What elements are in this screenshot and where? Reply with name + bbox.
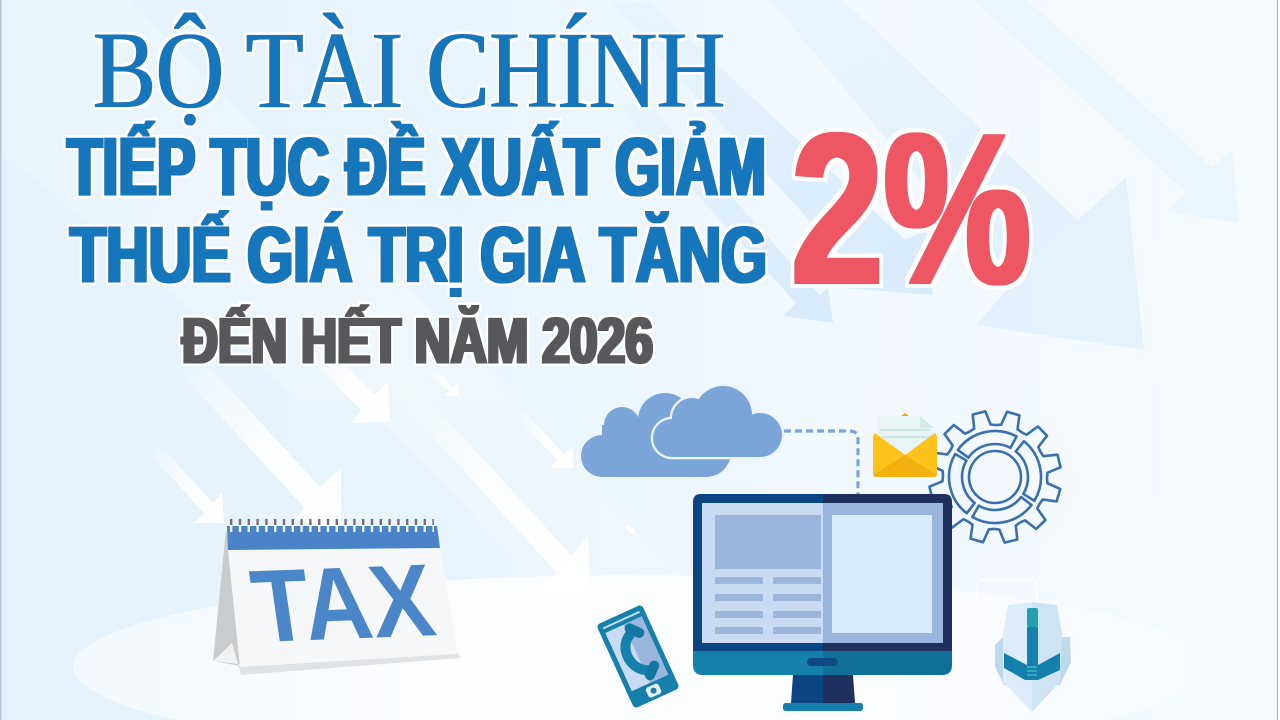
heading line: tiếp tục đề xuất giảm: TIẾP TỤC ĐỀ XUẤT GIẢM	[67, 119, 766, 213]
arrow: small pale arrow	[620, 95, 833, 323]
icon: smartphone	[596, 604, 680, 709]
arrow: pale arrow behind percent	[610, 2, 933, 295]
arrow: white arrow 4	[184, 357, 341, 530]
letter	[877, 416, 934, 460]
icon: gear	[928, 410, 1062, 544]
monitor button	[807, 658, 838, 666]
dashed connector	[784, 431, 858, 494]
screen image block	[715, 515, 821, 569]
lower bezel	[693, 651, 823, 675]
calendar band	[227, 526, 440, 550]
frame	[693, 494, 823, 651]
icon: TAX desk calendar	[213, 522, 460, 675]
icon: clouds	[581, 386, 782, 477]
subheading: đến hết năm 2026: ĐẾN HẾT NĂM 2026	[182, 304, 653, 377]
screen	[702, 503, 823, 643]
calendar page	[228, 548, 458, 667]
arrow: white arrow 1	[311, 345, 390, 423]
arrow: white arrow 2	[428, 368, 459, 396]
base	[783, 703, 863, 711]
calendar back	[213, 530, 240, 666]
back cloud	[581, 393, 733, 477]
TAX word: TAX	[245, 543, 441, 664]
icon: computer monitor	[693, 494, 952, 711]
big number: 2%: 2%	[791, 88, 1031, 329]
envelope body	[873, 433, 937, 477]
title: BỘ TÀI CHÍNH: BỘ TÀI CHÍNH	[93, 9, 725, 131]
stand	[791, 675, 823, 703]
arrow: white arrow 6	[397, 380, 590, 593]
calendar rings	[230, 522, 434, 529]
arrow: large pale arrow right	[770, 0, 1144, 350]
icon: envelope	[873, 413, 937, 477]
arrow: white arrow 3	[517, 410, 573, 468]
mouse scroll stick	[1027, 608, 1038, 627]
mouse chevron	[1004, 653, 1060, 680]
arrow: far right pale arrow	[973, 0, 1239, 223]
front cloud	[653, 386, 782, 457]
icon: computer mouse	[977, 580, 1071, 712]
arrow: white arrow 7	[625, 525, 635, 534]
envelope lower fold	[873, 455, 937, 477]
mouse shell	[1003, 602, 1032, 712]
screen rows	[715, 577, 821, 634]
arrow: white arrow 5	[151, 445, 224, 523]
white ellipse floor	[73, 575, 1207, 720]
mouse side wings	[995, 637, 1071, 685]
heading line: thuế giá trị gia tăng: THUẾ GIÁ TRỊ GIA TĂNG	[70, 210, 767, 299]
screen side panel	[832, 515, 932, 633]
mouse cable	[977, 580, 1037, 690]
calendar base edge	[238, 652, 460, 675]
